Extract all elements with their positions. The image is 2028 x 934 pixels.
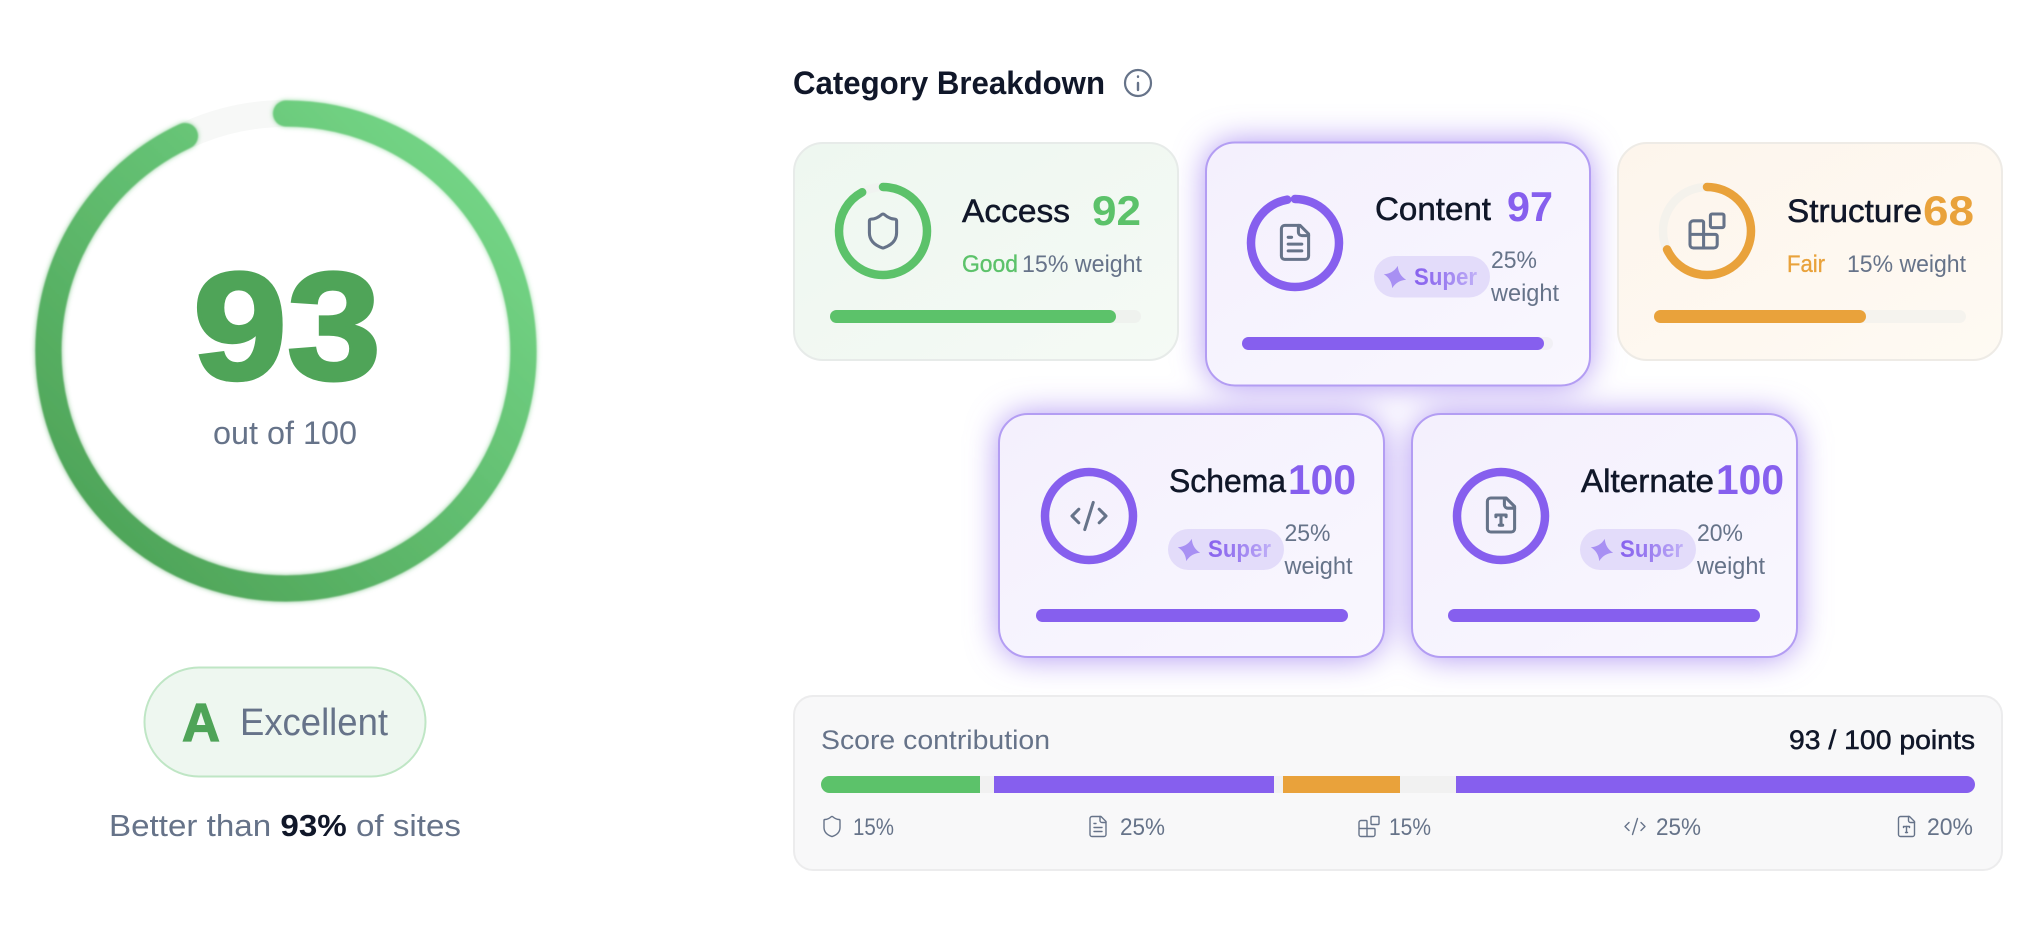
- super badge: Super: [1208, 536, 1271, 563]
- glow: super cards: [999, 142, 1797, 658]
- access bar: [830, 310, 1141, 323]
- access name: Access: [962, 193, 1070, 229]
- contribution label: Score contribution: [821, 725, 1050, 755]
- panel: content card: [1206, 142, 1590, 386]
- icon: info: [1125, 70, 1151, 96]
- stacked contribution bar: [821, 776, 1975, 793]
- legend: access weight: [824, 814, 894, 841]
- grade badge: [144, 668, 426, 776]
- schema weight: 25%: [1284, 520, 1330, 547]
- structure bar: [1654, 310, 1966, 323]
- super badge: [1374, 256, 1490, 298]
- panel: overall score: [48, 114, 524, 843]
- schema ring: [1045, 472, 1133, 560]
- heading: category breakdown: Category Breakdown: [793, 65, 1105, 101]
- icon: document: [1281, 225, 1309, 259]
- grade badge: Excellent: [240, 702, 388, 744]
- legend: schema weight: [1625, 814, 1701, 841]
- icon: blocks: [1690, 214, 1724, 248]
- content score: 97: [1507, 183, 1553, 230]
- super badge: [1580, 529, 1696, 570]
- grade badge: A: [182, 693, 220, 753]
- icon: code: [1072, 502, 1106, 530]
- access ring: [839, 187, 927, 275]
- structure name: Structure: [1787, 193, 1922, 229]
- legend: structure weight: [1359, 814, 1431, 841]
- panel: alternate card: [1412, 414, 1797, 657]
- super badge: [1168, 529, 1284, 570]
- content ring: [1251, 199, 1339, 287]
- legend: schema weight: 25%: [1656, 814, 1701, 841]
- schema score: 100: [1288, 456, 1356, 503]
- super badge: Super: [1620, 536, 1683, 563]
- structure score: 68: [1923, 187, 1974, 234]
- alternate name: Alternate: [1581, 463, 1714, 499]
- content name: Content: [1375, 191, 1491, 227]
- panel: score contribution: [794, 696, 2002, 870]
- access weight: 15% weight: [1022, 251, 1142, 278]
- legend: alternate weight: 20%: [1927, 814, 1973, 841]
- structure weight: 15% weight: [1847, 251, 1966, 278]
- schema bar: [1036, 609, 1348, 622]
- super badge: Super: [1414, 264, 1477, 291]
- alternate score: 100: [1716, 456, 1784, 503]
- alternate weight: weight: [1696, 553, 1765, 580]
- legend: access weight: 15%: [853, 814, 894, 841]
- content weight: weight: [1490, 280, 1559, 307]
- access score: 92: [1092, 187, 1141, 234]
- structure rating: Fair: [1787, 251, 1825, 278]
- panel: schema card: [999, 414, 1384, 657]
- legend: structure weight: 15%: [1389, 814, 1431, 841]
- alternate ring: [1457, 472, 1545, 560]
- icon: shield: [869, 214, 897, 248]
- contribution total: 93 / 100 points: [1789, 725, 1975, 755]
- legend: alternate weight: [1898, 814, 1973, 841]
- structure ring: [1663, 187, 1751, 275]
- legend: content weight: [1090, 814, 1165, 841]
- score ring: [48, 114, 524, 588]
- score value: 93: [193, 241, 381, 412]
- access rating: Good: [962, 251, 1018, 278]
- panel: access card: [794, 143, 1178, 360]
- panel: structure card: [1618, 143, 2002, 360]
- percentile text: Better than 93% of sites: [109, 808, 461, 843]
- score caption: out of 100: [213, 415, 357, 451]
- schema name: Schema: [1169, 463, 1286, 499]
- content weight: 25%: [1491, 247, 1537, 274]
- icon: text file: [1487, 498, 1515, 532]
- legend: content weight: 25%: [1120, 814, 1165, 841]
- alternate weight: 20%: [1697, 520, 1743, 547]
- schema weight: weight: [1284, 553, 1353, 580]
- content bar: [1242, 337, 1553, 350]
- alternate bar: [1448, 609, 1760, 622]
